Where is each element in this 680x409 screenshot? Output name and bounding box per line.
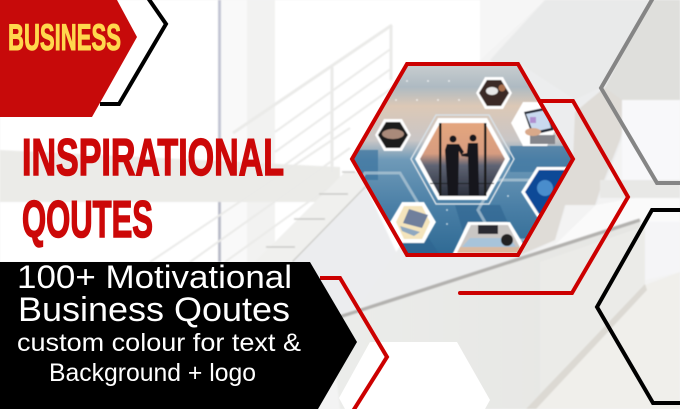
- mini hexagon: laptop: [390, 202, 436, 243]
- mini hexagon: tablet dashboard: [511, 102, 559, 146]
- mini hexagon: meeting table: [452, 221, 523, 253]
- panel headline line 1: 100+ Motivational: [17, 259, 292, 295]
- badge label: BUSINESS: [8, 17, 121, 58]
- red chevron bottom: [320, 278, 387, 409]
- grey hexagon outline: [601, 0, 680, 183]
- panel headline line 2: Business Qoutes: [18, 291, 290, 329]
- panel subtext line 1: custom colour for text &: [17, 329, 301, 357]
- mini hexagon: digital network: [520, 166, 566, 218]
- black hexagon outline right: [597, 210, 680, 403]
- main hexagon red border: [352, 64, 573, 255]
- white hexagon bottom: [339, 342, 490, 409]
- red badge: [0, 0, 137, 117]
- panel subtext line 2: Background + logo: [49, 359, 256, 387]
- black outline behind badge: [100, 0, 166, 104]
- title line 2: QOUTES: [22, 191, 153, 249]
- centre hexagon: handshake silhouettes: [411, 115, 514, 204]
- mini hexagon: handshake: [375, 119, 411, 151]
- red hexagon outline behind photo: [460, 101, 628, 293]
- title line 1: INSPIRATIONAL: [22, 129, 284, 187]
- mini hexagon: team at desk: [476, 77, 512, 109]
- black text panel: [0, 259, 357, 409]
- central hexagon photo collage: [347, 64, 586, 255]
